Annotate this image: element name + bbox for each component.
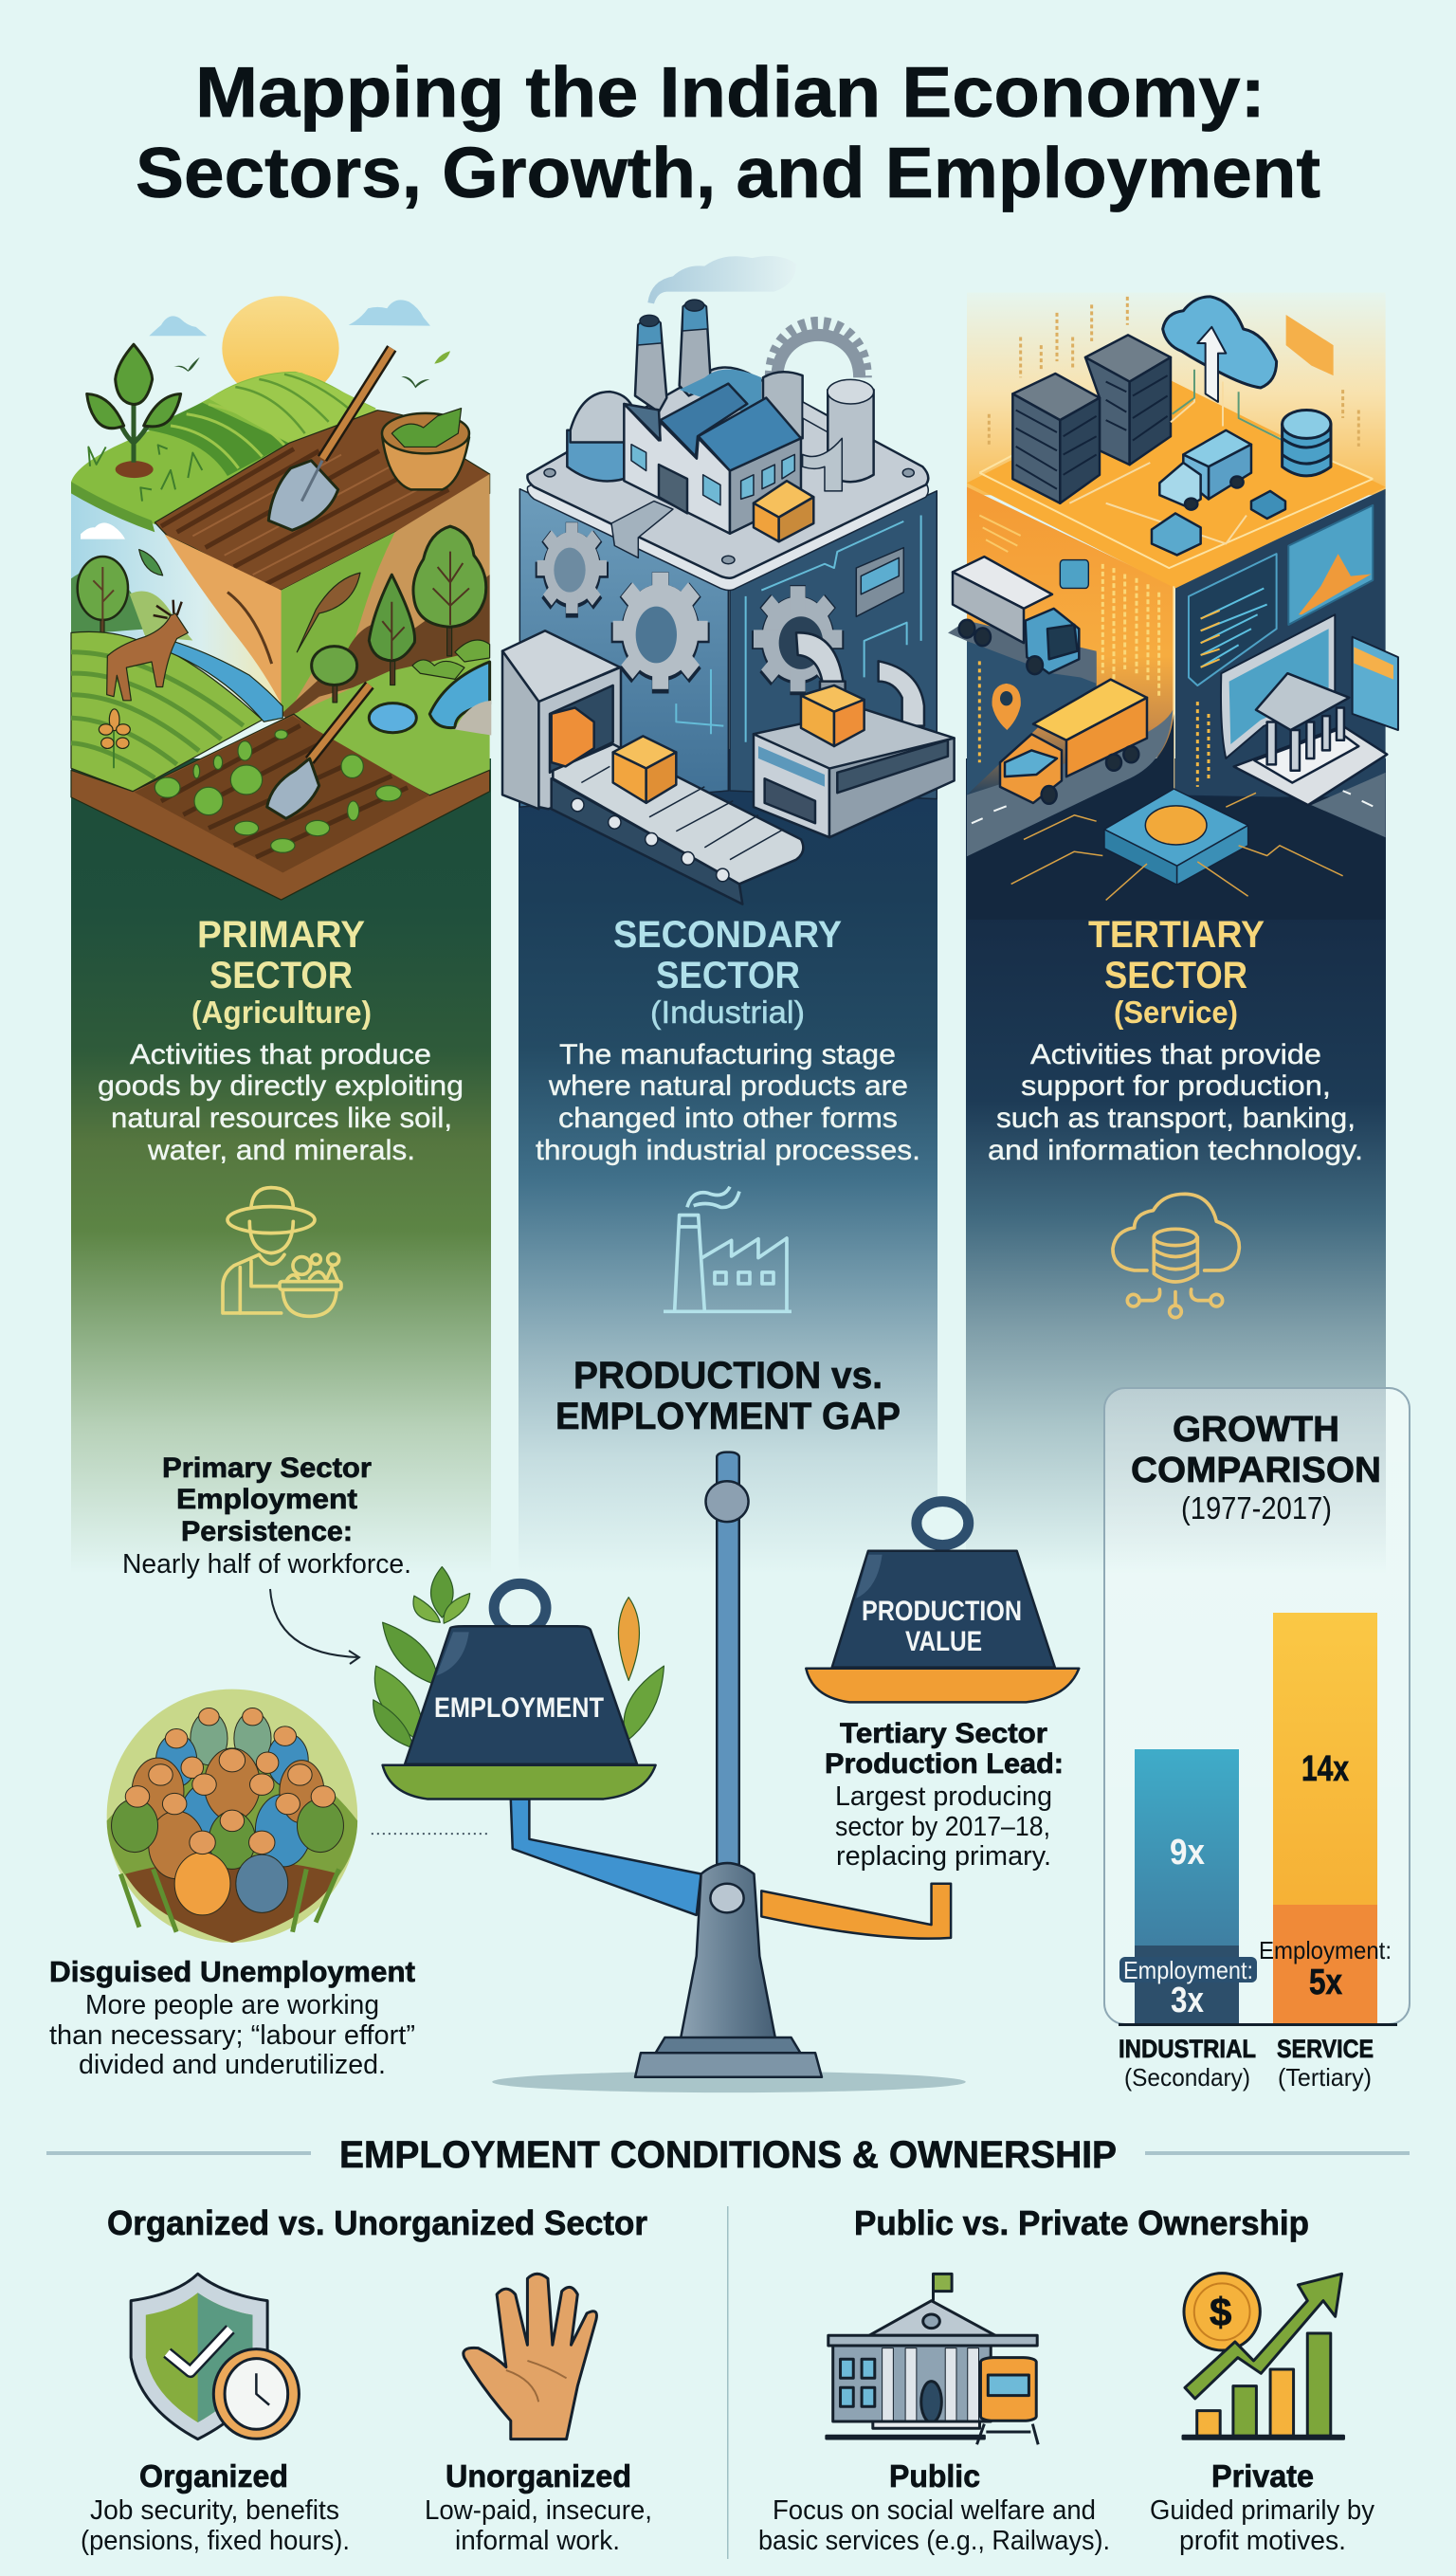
shovel bottom (267, 685, 370, 818)
label: private: Private (1211, 2458, 1314, 2494)
shovel top (268, 348, 391, 530)
description: tertiary sector: and information technology. (988, 1135, 1363, 1166)
icon: open hand (464, 2274, 596, 2439)
description: primary sector: water, and minerals. (147, 1135, 415, 1166)
label: public: basic services (e.g., Railways). (758, 2526, 1110, 2556)
description: secondary sector: The manufacturing stage (559, 1039, 896, 1070)
road left (967, 641, 1097, 795)
connector: dotted leader (372, 1833, 490, 1835)
dome tank (567, 392, 632, 481)
pan: green (383, 1765, 656, 1799)
dollar sign on coin: $ (1210, 2290, 1231, 2334)
icon: coin and growth chart (1183, 2274, 1343, 2439)
orange truck (1000, 680, 1147, 804)
label: public (758, 2458, 1110, 2556)
icon: factory outline (664, 1187, 792, 1311)
panel: secondary sector (502, 256, 955, 1574)
label: organized: Job security, benefits (90, 2495, 339, 2526)
face gears (536, 522, 844, 695)
bar: industrial: 3x (1171, 1981, 1204, 2020)
description: tertiary sector (988, 1039, 1363, 1166)
scale shadow (492, 2072, 966, 2092)
chart baseline (1119, 2023, 1397, 2026)
callout: tertiary production lead: sector by 2017–18, (835, 1812, 1050, 1842)
label: unorganized (425, 2458, 652, 2556)
heading: tertiary sector: (Service) (1114, 995, 1238, 1030)
cloud with arrow (1163, 297, 1277, 402)
label: unorganized: informal work. (455, 2526, 620, 2556)
label: private: profit motives. (1179, 2526, 1346, 2556)
label: private (1150, 2458, 1374, 2556)
heading: tertiary sector (1088, 914, 1265, 1030)
speech note (1286, 315, 1334, 375)
card: growth comparison (1104, 1388, 1410, 2092)
sapling (87, 344, 181, 478)
beam: blue arm (511, 1799, 701, 1915)
heading: production vs employment gap: EMPLOYMENT GAP (555, 1396, 901, 1437)
illustration: factory cube (502, 256, 955, 904)
heading: production vs employment gap (555, 1355, 901, 1437)
pipes (796, 632, 924, 726)
heading: primary sector: (Agriculture) (191, 995, 372, 1030)
crowd circle (107, 1690, 357, 1943)
callout: disguised unemployment (49, 1955, 415, 2080)
circuit traces (1011, 793, 1343, 900)
notch channel (611, 502, 673, 557)
callout: tertiary production lead: Tertiary Sector (840, 1718, 1047, 1749)
axis labels: SERVICE (1277, 2035, 1374, 2063)
subheading: public vs private: Public vs. Private Ownership (854, 2203, 1309, 2242)
arrow: persistence to weight (270, 1589, 359, 1664)
icon: shield and clock (131, 2274, 299, 2439)
description: tertiary sector: support for production, (1021, 1070, 1331, 1102)
bar: service: Employment: (1259, 1936, 1392, 1964)
subheading: organized vs unorganized: Organized vs. Unorganized Sector (107, 2203, 647, 2242)
bar: industrial: Employment: (1123, 1956, 1253, 1984)
description: primary sector: natural resources like soil, (111, 1103, 452, 1134)
callout: disguised unemployment: More people are working (85, 1990, 379, 2020)
heading: primary sector: PRIMARY (197, 914, 365, 956)
balance scale illustration (107, 1452, 1079, 2092)
heading: tertiary sector: TERTIARY (1088, 914, 1265, 956)
bar: service (1259, 1613, 1392, 2024)
label: public: Public (889, 2458, 980, 2494)
description: secondary sector: where natural products are (548, 1070, 908, 1102)
description: secondary sector (536, 1039, 920, 1166)
control panel (856, 548, 903, 616)
data blocks (1152, 491, 1285, 555)
label: production value weight: VALUE (905, 1626, 982, 1657)
database (1283, 410, 1331, 476)
wheat (99, 709, 130, 768)
panel: tertiary sector (948, 293, 1398, 1574)
server racks (1012, 335, 1171, 503)
icon: leaves behind weight (373, 1567, 664, 1748)
basket (382, 409, 469, 489)
callout: employment persistence: Employment (176, 1484, 357, 1515)
bar: industrial (1119, 1749, 1257, 2024)
soil field top (155, 411, 490, 590)
right machine (754, 710, 955, 837)
axis labels (1119, 2035, 1374, 2092)
callout: tertiary production lead (825, 1718, 1064, 1872)
bank (1234, 673, 1387, 805)
cylinders and pipes (763, 372, 874, 491)
heading: secondary sector: SECONDARY (613, 914, 842, 956)
axis labels: INDUSTRIAL (1119, 2035, 1256, 2063)
description: secondary sector: changed into other forms (558, 1103, 898, 1134)
label: public: Focus on social welfare and (773, 2495, 1096, 2526)
axis labels: (Secondary) (1124, 2063, 1250, 2092)
heading: growth comparison (1131, 1410, 1381, 1526)
weight: employment (405, 1583, 637, 1764)
callout: tertiary production lead: Largest producing (835, 1781, 1052, 1812)
white truck (953, 557, 1079, 674)
coin block (1104, 789, 1248, 885)
callout: disguised unemployment: divided and underutilized. (79, 2050, 386, 2080)
label: private: Guided primarily by (1150, 2495, 1374, 2526)
heading: tertiary sector: SECTOR (1104, 955, 1247, 996)
circuit lines (676, 515, 921, 742)
blue truck (1159, 430, 1251, 510)
orange box on machine (801, 685, 864, 746)
callout: employment persistence: Persistence: (181, 1516, 353, 1547)
label: organized: (pensions, fixed hours). (81, 2526, 350, 2556)
label: unorganized: Unorganized (446, 2458, 631, 2494)
callout: employment persistence (122, 1452, 411, 1580)
heading: growth comparison: (1977-2017) (1181, 1490, 1332, 1526)
scale column (635, 1863, 822, 2077)
axis labels: (Tertiary) (1278, 2063, 1372, 2092)
plate traces (1069, 370, 1283, 543)
trees right (312, 526, 486, 703)
label: organized: Organized (139, 2458, 288, 2494)
gear arch (771, 323, 865, 377)
label: production value weight: PRODUCTION (862, 1596, 1022, 1627)
scale pole (705, 1452, 749, 1868)
right grass (294, 649, 490, 795)
callout: tertiary production lead: Production Lead: (825, 1748, 1064, 1780)
bar: industrial: 9x (1170, 1833, 1205, 1873)
callout: disguised unemployment: Disguised Unemployment (49, 1955, 415, 1988)
label: employment weight: EMPLOYMENT (434, 1692, 604, 1724)
panel: primary sector (71, 296, 491, 1574)
dashboards (1189, 505, 1398, 758)
left machine (502, 630, 621, 809)
illustration: services cube (948, 293, 1398, 920)
section heading: employment conditions & ownership (46, 2134, 1410, 2176)
heading: primary sector: SECTOR (209, 955, 353, 996)
heading: production vs employment gap: PRODUCTION vs. (573, 1355, 883, 1397)
description: primary sector (98, 1039, 464, 1166)
section heading: employment conditions & ownership: EMPLOYMENT CONDITIONS & OWNERSHIP (339, 2134, 1117, 2176)
pan: orange (806, 1669, 1079, 1702)
icon: cloud database (1113, 1194, 1239, 1318)
icon: public building and train (827, 2274, 1038, 2444)
boxes on conveyor (552, 707, 676, 803)
beam: orange arm (761, 1884, 951, 1939)
description: tertiary sector: such as transport, banking, (996, 1103, 1356, 1134)
factory building (624, 384, 801, 534)
soil field bottom (71, 714, 490, 900)
subheading: industrial: (Industrial) (650, 995, 805, 1030)
title (136, 52, 1320, 212)
deer (107, 600, 188, 701)
callout: employment persistence: Nearly half of workforce. (122, 1549, 411, 1580)
heading: growth comparison: COMPARISON (1131, 1451, 1381, 1490)
description: tertiary sector: Activities that provide (1030, 1039, 1321, 1070)
chimneys (635, 300, 711, 412)
description: secondary sector: through industrial processes. (536, 1135, 920, 1166)
river (169, 641, 282, 722)
title: Sectors, Growth, and Employment (136, 133, 1320, 212)
callout: tertiary production lead: replacing primary. (836, 1841, 1051, 1872)
heading: secondary sector: SECTOR (656, 955, 800, 996)
bar: service: 5x (1309, 1963, 1342, 2002)
title: Mapping the Indian Economy: (195, 52, 1265, 132)
section divider (727, 2206, 728, 2559)
location pin (992, 684, 1021, 730)
label: unorganized: Low-paid, insecure, (425, 2495, 652, 2526)
bar: service: 14x (1301, 1749, 1349, 1789)
left field (71, 631, 263, 792)
callout: employment persistence: Primary Sector (162, 1452, 372, 1484)
box on deck (754, 481, 813, 541)
description: primary sector: goods by directly exploiting (98, 1070, 464, 1102)
heading: primary sector (191, 914, 372, 1030)
description: primary sector: Activities that produce (130, 1039, 431, 1070)
icon: farmer (223, 1188, 341, 1316)
heading: secondary sector (613, 914, 842, 996)
label: production value weight (862, 1596, 1022, 1657)
heading: growth comparison: GROWTH (1173, 1410, 1339, 1450)
tree: hill (78, 557, 128, 632)
weight: production value (832, 1502, 1055, 1668)
illustration: agriculture landscape (71, 296, 491, 900)
label: organized (81, 2458, 350, 2556)
conveyor (552, 744, 803, 904)
callout: disguised unemployment: than necessary; “labour effort” (49, 2020, 415, 2051)
